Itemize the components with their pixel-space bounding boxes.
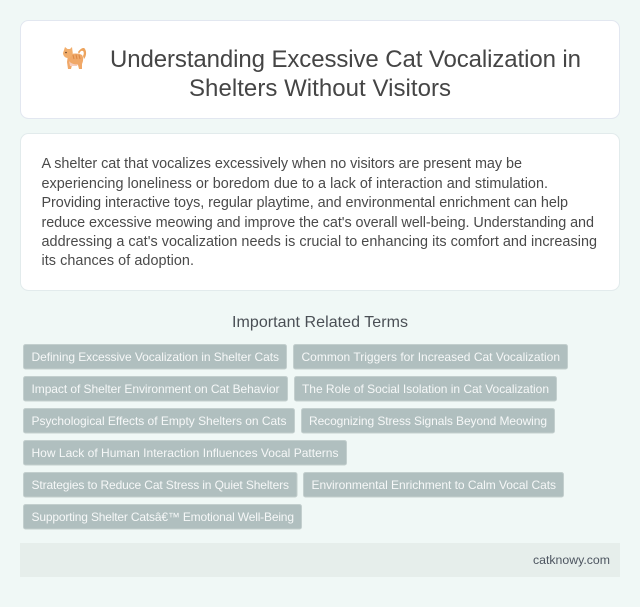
tag: Strategies to Reduce Cat Stress in Quiet Shelters: [32, 478, 289, 492]
panel: title card: [20, 20, 620, 118]
text block: description: addressing a cat's vocalization needs is crucial to enhancing its comfort and increasing: [42, 234, 597, 250]
tags: related terms: [24, 344, 568, 529]
tag: [302, 408, 554, 433]
tag: [24, 440, 346, 465]
text block: description: Providing interactive toys, regular playtime, and environmental enrichment can help: [42, 195, 568, 211]
tag: [294, 376, 556, 401]
tag: Environmental Enrichment to Calm Vocal Cats: [312, 478, 556, 492]
tag: Common Triggers for Increased Cat Vocalization: [302, 350, 560, 364]
tag: [24, 376, 288, 401]
panel: description card: [20, 134, 620, 290]
title: Understanding Excessive Cat Vocalization in: [110, 46, 581, 73]
footer: site name: catknowy.com: [533, 553, 610, 567]
tag: [24, 504, 302, 529]
heading: related terms: Important Related Terms: [232, 314, 408, 331]
text block: description: [42, 156, 597, 269]
tag: How Lack of Human Interaction Influences Vocal Patterns: [32, 446, 338, 460]
tag: Defining Excessive Vocalization in Shelter Cats: [32, 350, 279, 364]
text block: description: experiencing loneliness or boredom due to a lack of interaction and stimulation.: [42, 176, 548, 192]
tag: Recognizing Stress Signals Beyond Meowing: [309, 414, 547, 428]
tag: [24, 344, 286, 369]
tag: [304, 472, 564, 497]
tag: Impact of Shelter Environment on Cat Behavior: [32, 382, 280, 396]
text block: description: reduce excessive meowing and improve the cat's overall well-being. Understanding and: [42, 215, 594, 231]
text block: description: its chances of adoption.: [42, 253, 194, 269]
footer: [20, 543, 620, 577]
text block: description: A shelter cat that vocalizes excessively when no visitors are present may be: [42, 156, 522, 172]
title: Shelters Without Visitors: [189, 75, 451, 102]
tag: [24, 408, 294, 433]
tag: [24, 472, 297, 497]
tag: The Role of Social Isolation in Cat Vocalization: [302, 382, 549, 396]
tag: [294, 344, 568, 369]
title: [110, 46, 581, 102]
tag: Psychological Effects of Empty Shelters on Cats: [32, 414, 286, 428]
tag: Supporting Shelter Catsâ€™ Emotional Well-Being: [32, 510, 294, 524]
icon: cat: [63, 47, 86, 69]
